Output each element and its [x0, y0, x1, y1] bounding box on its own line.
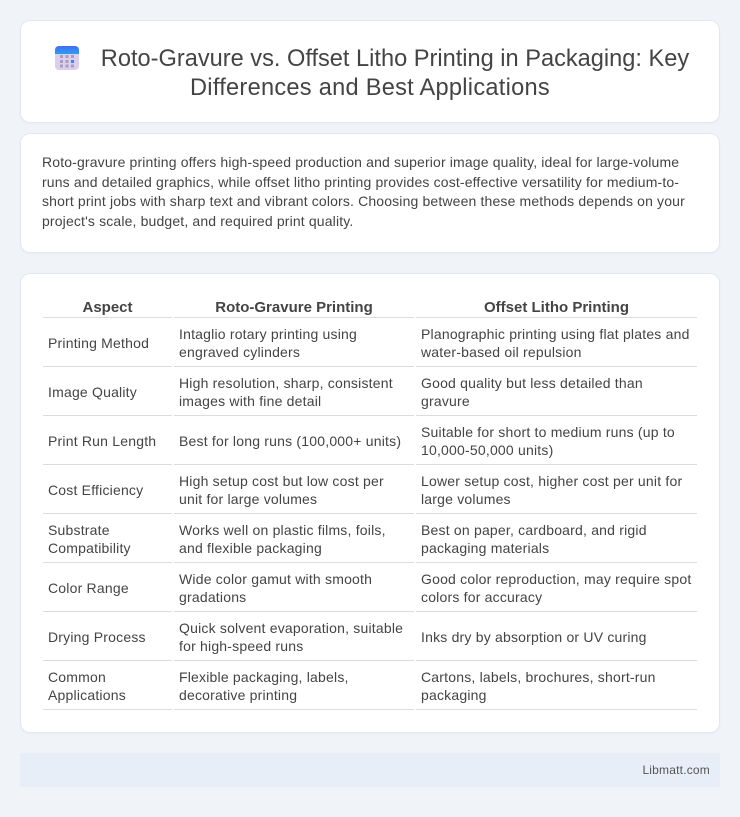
comparison table: Offset Litho Printing [484, 299, 629, 316]
comparison table: Applications [48, 687, 126, 703]
title [101, 46, 690, 100]
comparison table: Compatibility [48, 540, 131, 556]
panel: title card [20, 20, 720, 123]
comparison table: High resolution, sharp, consistent [179, 375, 393, 391]
comparison table: Cartons, labels, brochures, short-run [421, 669, 656, 685]
footer: Libmatt.com [642, 763, 710, 777]
intro text: short print jobs with sharp text and vibrant colors. Choosing between these methods depends on your [42, 193, 685, 209]
comparison table: water-based oil repulsion [421, 344, 582, 360]
intro text [42, 154, 685, 229]
comparison table: packaging materials [421, 540, 549, 556]
comparison table: Suitable for short to medium runs (up to [421, 424, 675, 440]
comparison table: Color Range [48, 580, 129, 596]
comparison table: Best on paper, cardboard, and rigid [421, 522, 647, 538]
comparison table: large volumes [421, 491, 511, 507]
comparison table: Aspect [82, 299, 133, 316]
icon: calendar grid [55, 46, 79, 70]
comparison table: Image Quality [48, 384, 137, 400]
comparison table: Print Run Length [48, 433, 156, 449]
comparison table: Best for long runs (100,000+ units) [179, 433, 401, 449]
comparison table: Inks dry by absorption or UV curing [421, 629, 647, 645]
comparison table: Drying Process [48, 629, 146, 645]
comparison table: Works well on plastic films, foils, [179, 522, 386, 538]
panel: comparison table [20, 273, 720, 733]
comparison table: Substrate [48, 522, 110, 538]
comparison table: Cost Efficiency [48, 482, 143, 498]
comparison table: for high-speed runs [179, 638, 303, 654]
comparison table: Lower setup cost, higher cost per unit for [421, 473, 682, 489]
comparison table: and flexible packaging [179, 540, 322, 556]
intro text: project's scale, budget, and required print quality. [42, 213, 353, 229]
comparison table: images with fine detail [179, 393, 321, 409]
comparison table [43, 299, 697, 710]
comparison table: Flexible packaging, labels, [179, 669, 349, 685]
comparison table: Printing Method [48, 335, 149, 351]
title: Roto-Gravure vs. Offset Litho Printing in Packaging: Key [101, 46, 689, 72]
comparison table: 10,000-50,000 units) [421, 442, 553, 458]
comparison table: unit for large volumes [179, 491, 317, 507]
comparison table: Intaglio rotary printing using [179, 326, 357, 342]
footer [20, 753, 720, 787]
intro text: Roto-gravure printing offers high-speed production and superior image quality, ideal for large-volume [42, 154, 679, 170]
comparison table: Roto-Gravure Printing [215, 299, 373, 316]
comparison table: engraved cylinders [179, 344, 300, 360]
panel: introduction [20, 133, 720, 253]
intro text: runs and detailed graphics, while offset litho printing provides cost-effective versatility for medium-to- [42, 174, 679, 190]
comparison table: Good quality but less detailed than [421, 375, 643, 391]
comparison table: gradations [179, 589, 246, 605]
comparison table: Good color reproduction, may require spot [421, 571, 691, 587]
comparison table: colors for accuracy [421, 589, 542, 605]
comparison table: Quick solvent evaporation, suitable [179, 620, 403, 636]
comparison table: Common [48, 669, 106, 685]
comparison table: gravure [421, 393, 470, 409]
comparison table: packaging [421, 687, 487, 703]
comparison table: High setup cost but low cost per [179, 473, 384, 489]
title: Differences and Best Applications [190, 74, 550, 100]
comparison table: Wide color gamut with smooth [179, 571, 372, 587]
comparison table: decorative printing [179, 687, 297, 703]
comparison table: Planographic printing using flat plates and [421, 326, 690, 342]
